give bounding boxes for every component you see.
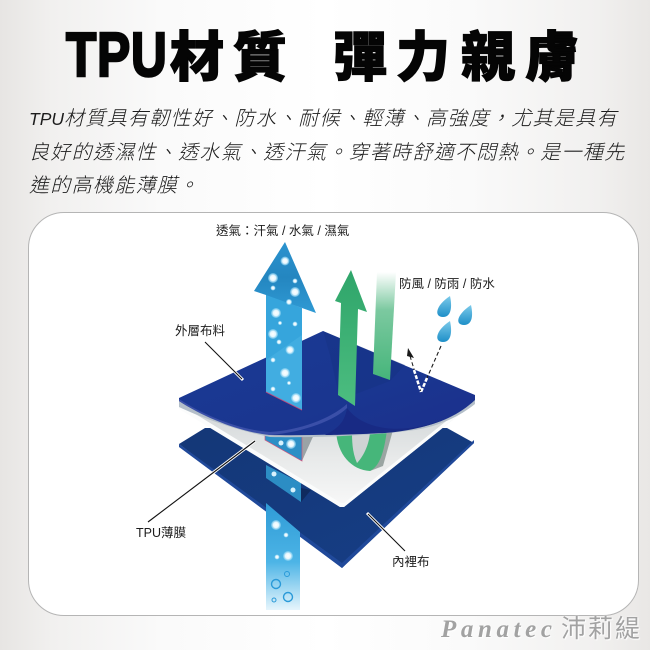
green arrow	[335, 270, 367, 406]
leader line: TPU film	[148, 441, 255, 522]
leader line: inner lining	[367, 513, 405, 551]
upper blue segment on membrane	[265, 430, 316, 461]
label: TPU film: TPU薄膜	[136, 526, 187, 540]
body text: TPU材質具有韌性好、防水、耐候、輕薄、高強度，尤其是具有	[29, 108, 618, 130]
body text: 良好的透濕性、透水氣、透汗氣。穿著時舒適不悶熱。是一種先	[29, 142, 625, 164]
body text: 進的高機能薄膜。	[29, 175, 199, 197]
leader line: outer fabric	[205, 342, 243, 380]
title: 彈	[333, 28, 387, 88]
green strip fading upward	[373, 272, 396, 380]
big blue arrow: breathable	[254, 242, 316, 410]
title: 力	[396, 28, 450, 88]
watermark brand	[441, 615, 642, 643]
water deflection arrows	[407, 346, 441, 392]
water drops	[437, 296, 472, 342]
green loop	[336, 430, 393, 471]
title: 膚	[525, 28, 579, 88]
body text	[29, 108, 625, 197]
title: TPU	[66, 21, 168, 90]
title: 親	[461, 28, 515, 88]
title	[66, 21, 579, 90]
label: outer fabric: 外層布料	[175, 324, 226, 338]
label: wind and water proof: 防風 / 防雨 / 防水	[399, 276, 495, 291]
lower navy sheet	[179, 428, 474, 568]
watermark brand: Panatec	[441, 616, 557, 643]
label: breathable: 透氣：汗氣 / 水氣 / 濕氣	[216, 224, 349, 238]
white TPU membrane	[179, 380, 475, 507]
upper navy outer fabric	[179, 331, 475, 437]
label: inner lining: 內裡布	[392, 554, 430, 569]
title: 質	[233, 28, 287, 88]
title: 材	[170, 28, 224, 88]
panel: diagram card	[28, 212, 639, 616]
watermark brand: 沛莉緹	[561, 615, 642, 643]
lower blue air stream	[266, 503, 300, 610]
middle blue air stream	[266, 465, 311, 502]
